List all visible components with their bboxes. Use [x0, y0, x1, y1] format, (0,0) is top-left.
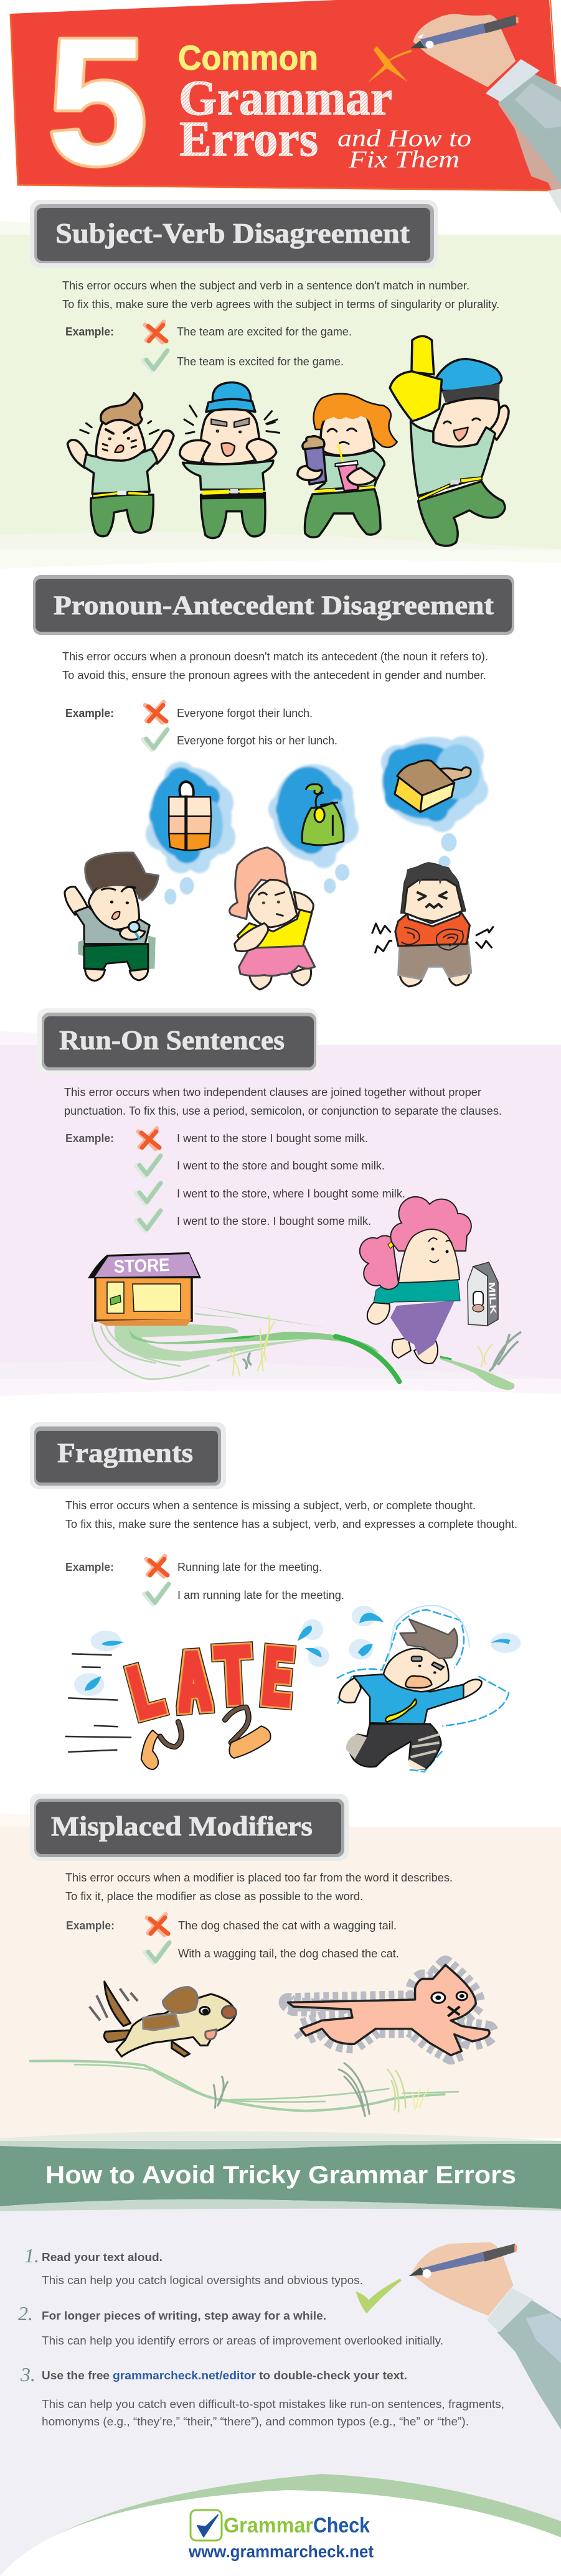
character: running late man — [337, 1606, 521, 1772]
logo: GrammarCheck: Check — [313, 2514, 370, 2537]
tip 2: 2. — [18, 2302, 33, 2325]
example block: Everyone forgot their lunch. — [177, 707, 313, 719]
letter L: L — [122, 1648, 169, 1733]
tip 3: 3. — [20, 2363, 35, 2386]
character: angry boy — [67, 393, 174, 536]
icon: check — [144, 1584, 169, 1604]
letter A: A — [175, 1635, 212, 1729]
title: Grammar: Grammar — [179, 71, 392, 126]
running legs and shoes — [141, 1707, 271, 1769]
example block: I went to the store I bought some milk. — [177, 1132, 368, 1145]
tip 1 — [24, 2244, 363, 2287]
heading: Run-On Sentences — [37, 1008, 318, 1074]
example block: I went to the store, where I bought some milk. — [177, 1187, 405, 1200]
example block — [66, 1914, 399, 1962]
banner: How to Avoid Tricky Grammar Errors: How to Avoid Tricky Grammar Errors — [45, 2161, 516, 2189]
tip 2 — [18, 2302, 443, 2347]
heading: Pronoun-Antecedent Disagreement: Pronoun-Antecedent Disagreement — [54, 591, 494, 621]
icon: cross — [145, 322, 166, 342]
text block: explanation: To avoid this, ensure the pronoun agrees with the antecedent in gender and number. — [62, 669, 486, 681]
tip 3: Use the free — [42, 2369, 110, 2382]
panel: subject-verb disagreement background — [0, 221, 561, 569]
example block — [65, 322, 352, 370]
heading: Fragments: Fragments — [57, 1438, 193, 1468]
text block: explanation: This error occurs when two independent clauses are joined together without proper — [64, 1086, 481, 1098]
logo: GrammarCheck — [191, 2510, 370, 2541]
character: blue hat boy — [180, 382, 280, 538]
thought cloud: food box — [381, 736, 488, 832]
heading: Pronoun-Antecedent Disagreement — [33, 575, 514, 635]
subtitle line 2: Fix Them — [348, 146, 460, 173]
icon: check — [143, 729, 167, 749]
example block: With a wagging tail, the dog chased the cat. — [178, 1947, 399, 1960]
heading: Misplaced Modifiers — [30, 1794, 349, 1861]
example block: Everyone forgot his or her lunch. — [177, 734, 337, 747]
example block: The team are excited for the game. — [177, 326, 352, 338]
letter T: T — [214, 1629, 252, 1721]
illustration: grass line — [31, 2061, 458, 2116]
icon: green sign in door — [110, 1295, 121, 1305]
illustration: team of four characters — [67, 336, 509, 546]
example block: I went to the store and bought some milk. — [177, 1159, 385, 1172]
text block: explanation: punctuation. To fix this, use a period, semicolon, or conjunction to separate the clauses. — [64, 1105, 502, 1117]
letter E: E — [260, 1631, 295, 1723]
tip 3: This can help you catch even difficult-to-spot mistakes like run-on sentences, fragments, — [42, 2398, 504, 2410]
text block: explanation: To fix this, make sure the sentence has a subject, verb, and expresses a complete thought. — [65, 1518, 517, 1530]
text block: explanation: To fix it, place the modifier as close as possible to the word. — [65, 1890, 363, 1903]
banner: How to Avoid Tricky Grammar Errors — [0, 2144, 561, 2211]
thought cloud: green bag — [268, 764, 359, 868]
title: Common: Common — [178, 38, 318, 77]
header banner — [11, 0, 561, 213]
illustration: running dog — [90, 1982, 236, 2056]
thought bubbles — [164, 833, 456, 904]
example block: I went to the store. I bought some milk. — [177, 1215, 371, 1227]
list: tips — [18, 2244, 504, 2428]
icon: check — [145, 1942, 169, 1962]
character: boy with magnifier — [65, 853, 159, 981]
example block: Example: — [65, 1561, 114, 1573]
icon: check — [143, 350, 167, 370]
heading: Misplaced Modifiers: Misplaced Modifiers — [51, 1811, 313, 1842]
icon: check — [136, 1211, 161, 1230]
example block: Example: — [65, 326, 114, 338]
sweat drops — [349, 1606, 521, 1660]
illustration: running word LATE — [65, 1619, 329, 1769]
text block: explanation: This error occurs when the subject and verb in a sentence don't match in number. — [62, 279, 469, 292]
illustration: running cat — [288, 1965, 489, 2055]
character: girl with snacks — [298, 393, 397, 537]
footer arc — [0, 2474, 561, 2576]
subtitle line 1: and How to — [337, 125, 471, 152]
text block: explanation — [64, 1086, 502, 1117]
heading: Run-On Sentences: Run-On Sentences — [59, 1025, 285, 1056]
example block: Example: — [66, 1919, 115, 1932]
text block: explanation — [62, 279, 499, 311]
milk carton — [468, 1262, 499, 1326]
tip 1: Read your text aloud. — [42, 2251, 163, 2264]
text block: explanation: This error occurs when a pronoun doesn't match its antecedent (the noun it refers to). — [62, 650, 488, 663]
example block: The team is excited for the game. — [177, 355, 344, 368]
example block — [65, 1556, 344, 1604]
icon: hand with pen drawing a check — [358, 2242, 561, 2430]
icon: cross — [146, 1556, 167, 1576]
tip 2: This can help you identify errors or areas of improvement overlooked initially. — [42, 2335, 443, 2347]
example block — [65, 702, 337, 749]
panel: run-on sentences background — [0, 1031, 561, 1396]
icon: cross — [147, 1914, 168, 1935]
tip 1: 1. — [24, 2244, 39, 2267]
icon: check — [136, 1183, 161, 1203]
character: girl with ponytail — [230, 848, 315, 990]
icon: check badge — [191, 2510, 222, 2541]
thought cloud: lunch tin — [146, 762, 235, 873]
text block: explanation — [65, 1871, 453, 1903]
tip 1: This can help you catch logical oversights and obvious typos. — [42, 2274, 363, 2287]
panel: misplaced modifiers background — [0, 1814, 561, 2138]
example block: Running late for the meeting. — [177, 1561, 322, 1573]
heading: Fragments — [30, 1422, 226, 1489]
milk label: MILK — [487, 1281, 499, 1314]
text block: explanation — [65, 1499, 517, 1530]
icon: cross — [138, 1128, 159, 1149]
panel: how to avoid background — [0, 2131, 561, 2576]
example block: Example: — [65, 1132, 114, 1145]
website url: www.grammarcheck.net — [188, 2542, 374, 2561]
text block: explanation: To fix this, make sure the verb agrees with the subject in terms of singularity or plurality. — [62, 298, 499, 311]
illustration: store — [88, 1252, 201, 1326]
heading: Subject-Verb Disagreement — [30, 200, 438, 268]
big number 5: 5 — [47, 1, 148, 202]
logo: GrammarCheck: Grammar — [224, 2514, 313, 2537]
tip 2: For longer pieces of writing, step away for a while. — [42, 2310, 326, 2322]
text block: explanation — [62, 650, 488, 681]
example block: Example: — [65, 707, 114, 719]
store sign text: STORE — [113, 1255, 170, 1277]
title: Errors: Errors — [179, 112, 318, 167]
icon: check — [136, 1156, 161, 1176]
character: girl carrying milk — [360, 1197, 499, 1364]
example block: I am running late for the meeting. — [177, 1589, 344, 1601]
tip 3: to double-check your text. — [259, 2369, 407, 2382]
example block: The dog chased the cat with a wagging tail. — [178, 1919, 397, 1932]
character: jumping fan with foam finger — [390, 336, 509, 546]
icon: hand with marker drawing an X — [367, 14, 561, 213]
example block — [65, 1128, 405, 1230]
heading: Subject-Verb Disagreement: Subject-Verb Disagreement — [55, 218, 410, 249]
tip 3 — [20, 2363, 504, 2428]
icon: cross — [145, 702, 166, 723]
illustration: motion swoosh from store to girl — [92, 1305, 521, 1390]
tip 3: homonyms (e.g., “they’re,” “their,” “there”), and common typos (e.g., “he” or “the”). — [42, 2415, 469, 2428]
text block: explanation: This error occurs when a sentence is missing a subject, verb, or complete thought. — [65, 1499, 476, 1512]
speed lines and sweat drops — [65, 1619, 329, 1752]
character: shivering person — [372, 863, 494, 986]
tip 3: grammarcheck.net/editor — [113, 2369, 256, 2382]
text block: explanation: This error occurs when a modifier is placed too far from the word it describes. — [65, 1871, 453, 1884]
